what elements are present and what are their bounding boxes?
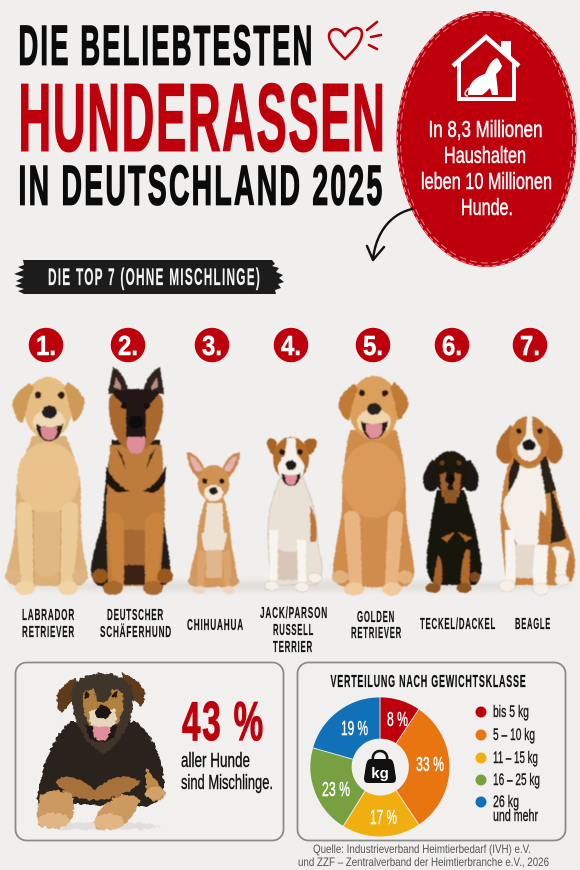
callout: households	[396, 11, 576, 267]
breed labels: RETRIEVER	[351, 625, 402, 642]
icon: kg weight: kg	[371, 765, 389, 782]
legend: bis 5 kg	[493, 702, 529, 721]
donut labels	[322, 709, 444, 829]
dog 6: teckel/dackel	[423, 451, 482, 593]
breed labels: RUSSELL	[273, 622, 314, 639]
floor shadow	[5, 581, 575, 591]
breed labels: TERRIER	[273, 639, 313, 656]
arrow	[367, 209, 412, 260]
donut labels: 19 %	[341, 718, 368, 740]
legend: und mehr	[493, 806, 538, 825]
legend: 16 – 25 kg	[493, 770, 540, 789]
donut labels: 8 %	[387, 709, 408, 731]
dog 3: chihuahua	[187, 452, 240, 594]
icon: heart with rays	[329, 22, 381, 59]
breed labels: TECKEL/DACKEL	[420, 616, 496, 633]
title	[18, 14, 386, 216]
stat caption: aller Hunde	[181, 750, 250, 772]
panel: weight classes	[298, 662, 566, 840]
rank badges: 4.	[281, 330, 301, 361]
rank badges: 7.	[520, 330, 540, 361]
panel: mixed breeds	[16, 662, 284, 840]
stat caption	[181, 750, 273, 794]
dog 7: beagle	[496, 416, 575, 595]
rank badges	[29, 328, 547, 362]
callout text: In 8,3 Millionen	[428, 116, 542, 142]
breed labels: DEUTSCHER	[107, 607, 164, 624]
stat: 43 %: 43 %	[182, 690, 265, 752]
rank badges: 3.	[202, 330, 222, 361]
breed labels: LABRADOR	[22, 607, 75, 624]
source note: Quelle: Industrieverband Heimtierbedarf (IVH) e.V.	[313, 842, 531, 856]
breed labels: CHIHUAHUA	[187, 617, 244, 634]
legend: 11 – 15 kg	[493, 748, 538, 767]
donut chart	[310, 697, 450, 837]
dog 5: golden retriever	[332, 376, 414, 596]
dog 4: jack/parson russell terrier	[265, 437, 322, 592]
donut labels: 17 %	[370, 807, 397, 829]
callout text: Haushalten	[444, 142, 526, 168]
rank badges: 2.	[118, 330, 138, 361]
rank badges: 6.	[442, 330, 462, 361]
source note	[298, 842, 549, 869]
legend: 5 – 10 kg	[493, 725, 535, 744]
callout text	[421, 116, 552, 220]
dog 1: labrador retriever	[5, 377, 88, 595]
donut labels: 33 %	[416, 754, 444, 776]
breed labels: SCHÄFERHUND	[100, 624, 172, 641]
stat caption: sind Mischlinge.	[181, 772, 273, 794]
breed labels	[22, 605, 551, 656]
callout text: Hunde.	[461, 194, 513, 220]
legend: 26 kg	[493, 792, 519, 811]
legend	[476, 702, 540, 825]
dog 2: deutscher schaeferhund	[91, 367, 173, 595]
breed labels: GOLDEN	[357, 609, 395, 626]
donut labels: 23 %	[322, 779, 350, 801]
breed labels: JACK/PARSON	[260, 605, 328, 622]
icon: kg weight	[364, 751, 396, 783]
rank badges: 1.	[36, 330, 56, 361]
icon: house with dog	[453, 37, 519, 99]
banner: top 7: DIE TOP 7 (OHNE MISCHLINGE)	[48, 264, 261, 291]
icon: mixed-breed dog	[37, 672, 165, 830]
banner: top 7	[14, 260, 284, 294]
breed labels: RETRIEVER	[22, 624, 75, 641]
rank badges: 5.	[363, 330, 383, 361]
